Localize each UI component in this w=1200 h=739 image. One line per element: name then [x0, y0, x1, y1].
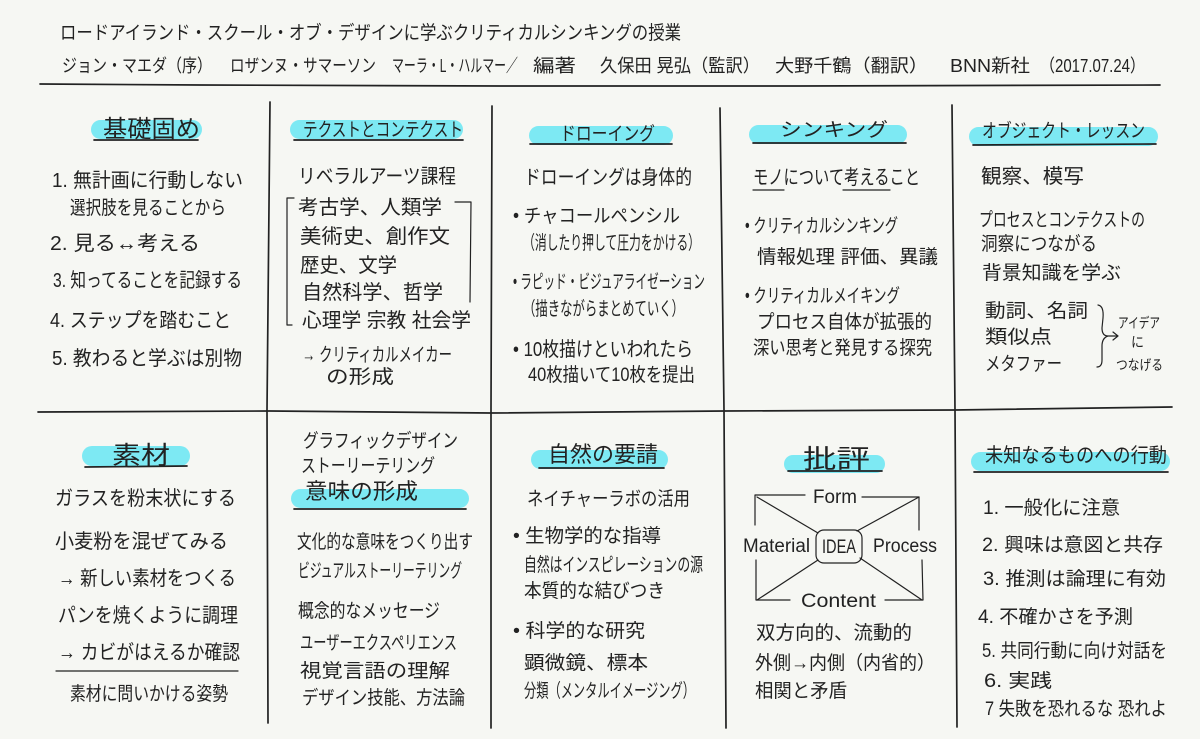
bullets: • クリティカルシンキング: [745, 215, 898, 237]
body text: 概念的なメッセージ: [298, 600, 440, 622]
bracketed subject list: 歴史、文学: [300, 254, 397, 277]
body text: 洞察につながる: [981, 233, 1097, 255]
panel title lines: グラフィックデザイン: [303, 430, 458, 452]
credits line: マーラ・L・ハルマー／: [392, 56, 518, 76]
header: book title and credits: [60, 21, 1145, 76]
heading: 未知なるものへの行動: [971, 444, 1170, 472]
arrow note: クリティカルメイカーの形成: の形成: [326, 366, 394, 388]
body text: • 科学的な研究: [513, 620, 645, 642]
panel title lines: [301, 430, 458, 477]
heading: 意味の形成: 意味の形成: [305, 479, 418, 504]
diagram: IDEA: IDEA: [822, 537, 856, 558]
diagram: IDEA: Process: [873, 536, 937, 557]
bullets: • クリティカルメイキング: [745, 285, 900, 307]
panel: 未知なるものへの行動: [971, 444, 1170, 720]
body text: 顕微鏡、標本: [524, 652, 648, 674]
arrow note: クリティカルメイカーの形成: [302, 344, 452, 388]
numbered list: 6. 実践: [984, 670, 1052, 692]
heading: オブジェクト・レッスン: オブジェクト・レッスン: [982, 119, 1145, 142]
diagram: IDEA: Content: [801, 591, 877, 612]
body text: • チャコールペンシル: [513, 206, 680, 227]
panel: シンキング: [745, 119, 938, 359]
heading: テクストとコンテクスト: テクストとコンテクスト: [303, 119, 463, 141]
numbered list: 5. 共同行動に向け対話を: [982, 640, 1167, 662]
body text: 双方向的、流動的: [756, 622, 912, 644]
body text: 観察、模写: [981, 165, 1084, 188]
brace diagram: アイデアにつなげる: に: [1131, 334, 1144, 350]
heading: 素材: [82, 442, 190, 470]
panel: テクストとコンテクスト: [287, 119, 471, 388]
arrow note: クリティカルメイカーの形成: → クリティカルメイカー: [302, 344, 452, 366]
numbered list: 4. ステップを踏むこと: [50, 309, 231, 332]
numbered list: 1. 一般化に注意: [983, 497, 1120, 519]
bullets: [745, 215, 938, 359]
numbered list: 選択肢を見ることから: [70, 197, 226, 219]
numbered list: [50, 169, 243, 370]
body text: （描きながらまとめていく）: [523, 298, 684, 320]
heading: 基礎固め: 基礎固め: [103, 116, 200, 143]
credits line: （2017.07.24）: [1040, 56, 1145, 76]
panel: グラフィックデザイン: [291, 430, 473, 709]
body text: 自然はインスピレーションの源: [524, 554, 703, 576]
body text: （消したり押して圧力をかける）: [523, 232, 700, 254]
brace diagram: アイデアにつなげる: メタファー: [985, 353, 1062, 375]
リベラルアーツ課程: リベラルアーツ課程: [298, 165, 456, 188]
panel: 素材: [55, 442, 240, 705]
body text: 背景知識を学ぶ: [982, 262, 1121, 284]
body text: ネイチャーラボの活用: [527, 488, 690, 510]
body text: → 新しい素材をつくる: [58, 567, 236, 590]
body text: 本質的な結びつき: [524, 580, 665, 602]
bullets: 深い思考と発見する探究: [753, 337, 932, 359]
credits line: ロザンヌ・サマーソン: [230, 56, 376, 76]
body text: • 生物学的な指導: [513, 525, 661, 547]
numbered list: 4. 不確かさを予測: [978, 606, 1133, 628]
credits line: ジョン・マエダ（序）: [62, 56, 212, 76]
bracketed subject list: 考古学、人類学: [298, 196, 442, 219]
numbered list: 3. 推測は論理に有効: [983, 568, 1166, 590]
body text: • ラピッド・ビジュアライゼーション: [513, 271, 705, 293]
panel title lines: ストーリーテリング: [301, 455, 435, 477]
numbered list: 1. 無計画に行動しない: [52, 169, 243, 192]
heading: ドローイング: ドローイング: [560, 123, 655, 145]
panel: 自然の要請: [513, 442, 703, 702]
credits line: 大野千鶴（翻訳）: [775, 56, 928, 76]
panel: ドローイング: [513, 123, 705, 386]
body text: [755, 622, 935, 702]
body text: 分類（メンタルイメージング）: [524, 680, 695, 702]
brace diagram: アイデアにつなげる: アイデア: [1118, 315, 1160, 331]
body text: [297, 531, 473, 709]
body text: [55, 487, 240, 705]
body text: 素材に問いかける姿勢: [70, 683, 228, 705]
credits line: [62, 56, 1145, 76]
heading: 未知なるものへの行動: 未知なるものへの行動: [985, 444, 1167, 467]
bracketed subject list: 美術史、創作文: [300, 225, 450, 248]
body text: ユーザーエクスペリエンス: [300, 632, 457, 654]
body text: [513, 488, 703, 702]
brace diagram: アイデアにつなげる: つなげる: [1116, 357, 1163, 373]
panel: 基礎固め: [50, 116, 243, 370]
heading: 素材: 素材: [112, 442, 170, 470]
body text: 相関と矛盾: [755, 680, 847, 702]
body text: ガラスを粉末状にする: [55, 487, 236, 510]
body text: 小麦粉を混ぜてみる: [55, 530, 228, 553]
body text: 視覚言語の理解: [300, 660, 450, 682]
heading: シンキング: [749, 119, 907, 144]
heading: オブジェクト・レッスン: [969, 119, 1158, 146]
panel: 批評: [743, 444, 937, 702]
bullets: 情報処理 評価、異議: [757, 246, 938, 268]
bracketed subject list: 自然科学、哲学: [302, 281, 443, 304]
heading: 意味の形成: [291, 479, 469, 509]
bracketed subject list: [287, 196, 471, 332]
モノについて考えること: モノについて考えること: [753, 166, 920, 189]
diagram: IDEA: [743, 487, 937, 612]
credits line: 編著: [533, 56, 576, 76]
body text: → カビがはえるか確認: [58, 641, 240, 664]
heading: テクストとコンテクスト: [290, 119, 463, 141]
bracketed subject list: 心理学 宗教 社会学: [302, 309, 471, 332]
numbered list: 2. 興味は意図と共存: [982, 534, 1163, 556]
body text: デザイン技能、方法論: [302, 687, 465, 709]
body text: [513, 166, 705, 386]
body text: 40枚描いて10枚を提出: [528, 364, 695, 386]
numbered list: 7 失敗を恐れるな 恐れよ: [985, 698, 1167, 720]
body text: パンを焼くように調理: [58, 604, 238, 627]
body text: 外側→内側（内省的）: [755, 652, 935, 674]
body text: [979, 165, 1145, 284]
credits line: BNN新社: [950, 56, 1030, 76]
heading: 批評: 批評: [803, 444, 870, 474]
body text: • 10枚描けといわれたら: [513, 338, 693, 361]
body text: ビジュアルストーリーテリング: [298, 560, 462, 582]
numbered list: 3. 知ってることを記録する: [53, 269, 242, 292]
heading: 自然の要請: 自然の要請: [548, 442, 658, 467]
body text: 文化的な意味をつくり出す: [297, 531, 473, 553]
numbered list: [978, 497, 1167, 720]
body text: ドローイングは身体的: [524, 166, 692, 189]
numbered list: 5. 教わると学ぶは別物: [52, 347, 242, 370]
brace diagram: アイデアにつなげる: 類似点: [985, 326, 1052, 348]
panel: オブジェクト・レッスン: [969, 119, 1163, 375]
heading: シンキング: シンキング: [780, 119, 888, 141]
diagram: IDEA: Material: [743, 536, 810, 557]
numbered list: 2. 見る↔考える: [50, 232, 200, 255]
credits line: 久保田 晃弘（監訳）: [600, 56, 760, 76]
bullets: プロセス自体が拡張的: [757, 311, 932, 333]
brace diagram: アイデアにつなげる: [985, 300, 1163, 375]
brace diagram: アイデアにつなげる: 動詞、名詞: [985, 300, 1088, 322]
heading: 批評: [784, 444, 885, 474]
book title: ロードアイランド・スクール・オブ・デザインに学ぶクリティカルシンキングの授業: [60, 21, 681, 44]
body text: プロセスとコンテクストの: [979, 209, 1145, 231]
diagram: IDEA: Form: [813, 487, 857, 508]
